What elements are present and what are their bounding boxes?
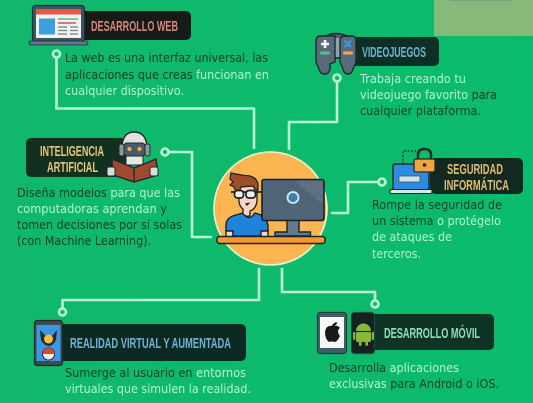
connector: VR to center	[62, 268, 259, 308]
description: exclusivas para Android o iOS.	[329, 377, 499, 391]
description: computadoras aprendan y	[17, 202, 167, 216]
connector: games to center	[289, 82, 337, 150]
monitor shine	[295, 180, 323, 205]
title pill	[350, 37, 439, 66]
title pill	[370, 314, 494, 350]
title: inteligencia artificial: INTELIGENCIA	[40, 144, 104, 160]
connector: web to center	[56, 58, 254, 149]
description	[65, 366, 251, 396]
developer head	[239, 186, 257, 216]
description: Sumerge al usuario en entornos	[65, 366, 246, 380]
monitor logo	[288, 192, 298, 203]
section: videojuegos	[316, 34, 497, 118]
description: La web es una interfaz universal, las	[65, 51, 268, 65]
connector: mobile node	[372, 300, 378, 308]
description: tomen decisiones por sí solas	[17, 218, 182, 232]
monitor stand	[275, 219, 310, 236]
icon: phone with augmented reality creature	[34, 320, 62, 366]
title pill	[26, 138, 126, 177]
desk	[217, 236, 325, 244]
developer glasses	[231, 190, 261, 198]
developer mouth	[245, 202, 250, 206]
description: Diseña modelos para que las	[17, 186, 180, 200]
connector: web node	[53, 50, 60, 58]
description: un sistema o protégelo	[372, 214, 501, 228]
title: inteligencia artificial: ARTIFICIAL	[47, 160, 98, 176]
icon: gamepad	[316, 34, 356, 74]
description: Trabaja creando tu	[359, 72, 466, 86]
description: de ataques de	[372, 230, 452, 244]
title: desarrollo movil: DESARROLLO MÓVIL	[384, 324, 480, 342]
description: aplicaciones que creas funcionan en	[65, 68, 269, 82]
description: cualquier plataforma.	[360, 104, 481, 118]
description: (con Machine Learning).	[17, 234, 151, 248]
title: realidad virtual y aumentada: REALIDAD VIRTUAL Y AUMENTADA	[70, 336, 231, 352]
description	[359, 72, 497, 118]
description: Desarrolla aplicaciones	[329, 361, 459, 375]
icon: laptop with padlock	[390, 149, 435, 194]
section: realidad virtual y aumentada	[34, 320, 251, 396]
description: virtuales que simulen la realidad.	[65, 382, 251, 396]
description: terceros.	[372, 247, 421, 261]
description: Rompe la seguridad de	[372, 198, 502, 212]
section: desarrollo movil	[318, 312, 499, 391]
icon: iPhone with apple logo	[318, 312, 346, 354]
connector: mobile to center	[282, 268, 375, 300]
icon: robot reading book	[107, 132, 158, 182]
section: inteligencia artificial	[17, 132, 182, 248]
description	[17, 186, 182, 248]
title: seguridad informatica	[444, 162, 509, 194]
connector: AI node	[162, 148, 168, 156]
description: videojuego favorito para	[360, 88, 497, 102]
title pill	[430, 158, 523, 194]
title: desarrollo web: DESARROLLO WEB	[91, 19, 178, 35]
connector: games node	[334, 74, 340, 82]
icon: Android phone	[352, 312, 374, 354]
connector: security to center	[331, 182, 378, 213]
title: inteligencia artificial	[40, 144, 104, 176]
developer hair	[230, 173, 258, 192]
title pill	[78, 11, 191, 40]
center illustration: developer at computer	[214, 152, 327, 265]
description	[65, 51, 269, 98]
section: desarrollo web	[29, 6, 269, 98]
description: cualquier dispositivo.	[65, 84, 184, 98]
connector: VR node	[59, 308, 66, 316]
developer shirt and arms	[226, 213, 268, 237]
connector: security node	[378, 178, 386, 186]
icon: laptop with web page	[29, 6, 88, 45]
corner patch	[434, 0, 533, 36]
section: seguridad informatica	[372, 149, 523, 261]
connector: AI to center	[169, 152, 212, 237]
title pill	[56, 324, 246, 361]
description	[372, 198, 502, 261]
description	[329, 361, 499, 391]
monitor	[262, 180, 324, 220]
title: seguridad informatica: SEGURIDAD	[447, 162, 503, 178]
title: videojuegos: VIDEOJUEGOS	[362, 45, 426, 61]
